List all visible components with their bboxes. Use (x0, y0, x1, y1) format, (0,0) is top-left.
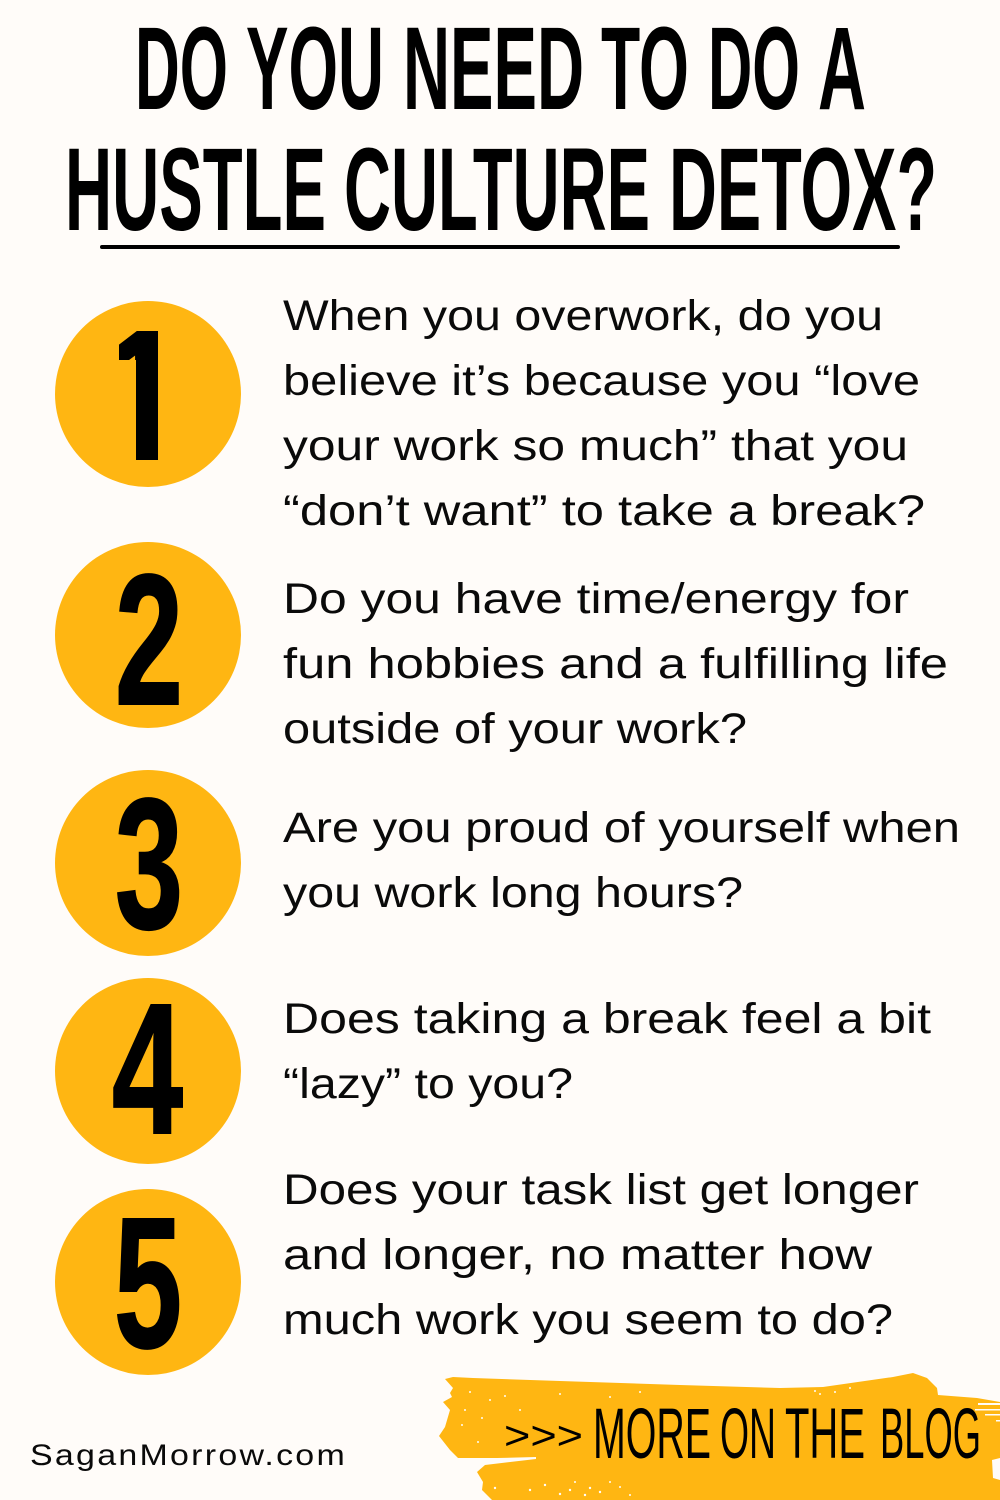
blog label: THE (785, 1395, 865, 1474)
number badge 5: 5 (114, 1180, 182, 1387)
question 2 text: outside of your work? (283, 705, 747, 753)
question 4 text: Does taking a break feel a bit (283, 995, 931, 1043)
question 2 text: fun hobbies and a fulfilling life (283, 640, 948, 688)
number badge 2 (55, 537, 241, 744)
item 2 (55, 537, 948, 753)
title: TO (601, 3, 689, 135)
item 1 (55, 292, 925, 535)
question 1 text: When you overwork, do you (283, 292, 883, 340)
blog label (593, 1395, 981, 1474)
title: NEED (403, 3, 584, 135)
title: A (818, 3, 866, 135)
title: YOU (246, 3, 384, 135)
number badge 3: 3 (115, 761, 183, 968)
question 1 text: your work so much” that you (283, 422, 908, 470)
title: DO (708, 3, 800, 135)
brush stroke banner (439, 1373, 1000, 1500)
number badge 3 (55, 761, 241, 968)
question 1 text (283, 292, 925, 535)
blog label: ON (720, 1395, 776, 1474)
title (65, 3, 937, 256)
question 5 text: much work you seem to do? (283, 1296, 893, 1344)
question 3 text: you work long hours? (283, 869, 743, 917)
number badge 4 (55, 966, 241, 1173)
title: DO (135, 3, 228, 135)
call to action (439, 1373, 1000, 1500)
question 2 text: Do you have time/energy for (283, 575, 909, 623)
item 4 (55, 966, 931, 1173)
question 2 text (283, 575, 948, 753)
question 1 text: believe it’s because you “love (283, 357, 920, 405)
number badge 5 (55, 1180, 241, 1387)
item 3 (55, 761, 960, 968)
question 3 text (283, 804, 960, 917)
number badge 2: 2 (115, 537, 183, 744)
question 4 text (283, 995, 931, 1108)
title: HUSTLE (65, 124, 326, 256)
number badge 1: 1 (99, 293, 187, 500)
question 4 text: “lazy” to you? (283, 1060, 573, 1108)
arrows glyph: >>> (504, 1414, 583, 1458)
website credit: SaganMorrow.com (30, 1439, 347, 1472)
question 1 text: “don’t want” to take a break? (283, 487, 925, 535)
question 5 text: and longer, no matter how (283, 1231, 873, 1279)
number badge 4: 4 (112, 966, 183, 1173)
title: CULTURE (344, 124, 650, 256)
blog label: MORE (593, 1395, 711, 1474)
question 5 text: Does your task list get longer (283, 1166, 919, 1214)
item 5 (55, 1166, 919, 1387)
question 5 text (283, 1166, 919, 1344)
number badge 1 (55, 301, 241, 487)
title underline (102, 245, 898, 249)
question 3 text: Are you proud of yourself when (283, 804, 960, 852)
